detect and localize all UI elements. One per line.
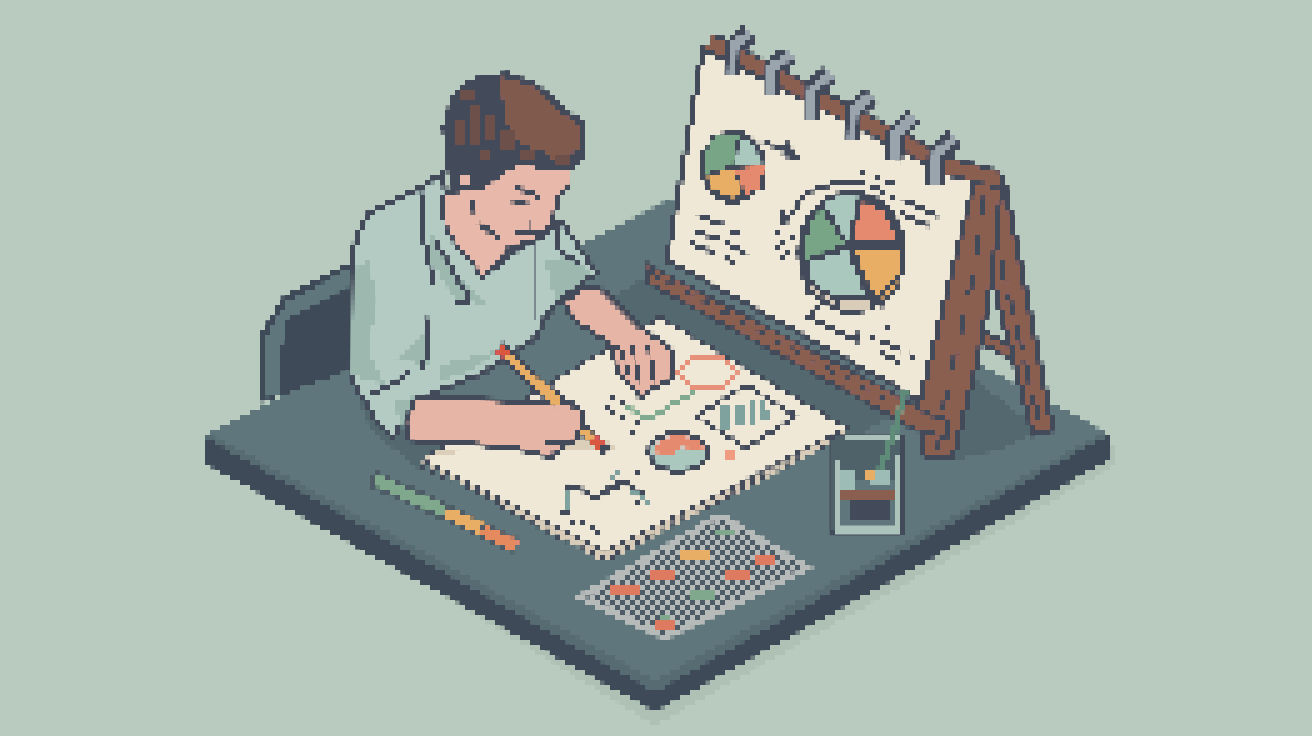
pixelated scene xyxy=(203,33,1115,725)
torso xyxy=(350,173,597,437)
pie dots and text lines xyxy=(775,170,897,340)
bottom left graph xyxy=(566,480,645,500)
hair xyxy=(442,72,585,190)
desk xyxy=(203,200,1115,725)
desk shadows xyxy=(350,275,1040,470)
far arm xyxy=(563,287,673,397)
text lines left xyxy=(690,215,747,264)
person xyxy=(350,72,673,457)
spiral rings xyxy=(732,33,955,184)
loose pen xyxy=(371,478,516,546)
shirt folds xyxy=(370,190,580,395)
flip chart paper xyxy=(667,50,975,400)
hand lines xyxy=(538,415,582,443)
teal bars xyxy=(722,400,772,428)
hair highlight xyxy=(500,77,578,160)
face xyxy=(440,160,570,277)
large pie chart xyxy=(799,192,905,312)
green line xyxy=(624,393,695,420)
ear xyxy=(458,162,474,186)
colour patches xyxy=(610,553,775,628)
easel back leg xyxy=(973,173,1053,435)
brush stem xyxy=(880,390,905,470)
easel ledge xyxy=(645,263,948,437)
notebook xyxy=(422,317,847,562)
red square xyxy=(723,449,737,458)
dark diamond xyxy=(696,385,796,448)
dark dots xyxy=(606,395,641,433)
near arm xyxy=(405,397,583,457)
pencil xyxy=(498,347,608,452)
hair strands xyxy=(455,90,570,163)
binding band xyxy=(710,42,1000,180)
shirt shading xyxy=(352,230,590,430)
half pie xyxy=(649,433,707,471)
big pie annotations xyxy=(781,182,863,345)
fingers xyxy=(618,345,655,385)
easel front leg xyxy=(918,178,1002,458)
red diamond xyxy=(676,358,736,388)
chair xyxy=(260,260,355,403)
small pie chart xyxy=(701,132,765,202)
notebook charts xyxy=(562,358,796,537)
facial features xyxy=(473,187,540,240)
easel crossbar xyxy=(973,325,1012,360)
palette grid xyxy=(580,515,808,638)
jar xyxy=(830,435,902,535)
small arrow xyxy=(763,141,797,156)
